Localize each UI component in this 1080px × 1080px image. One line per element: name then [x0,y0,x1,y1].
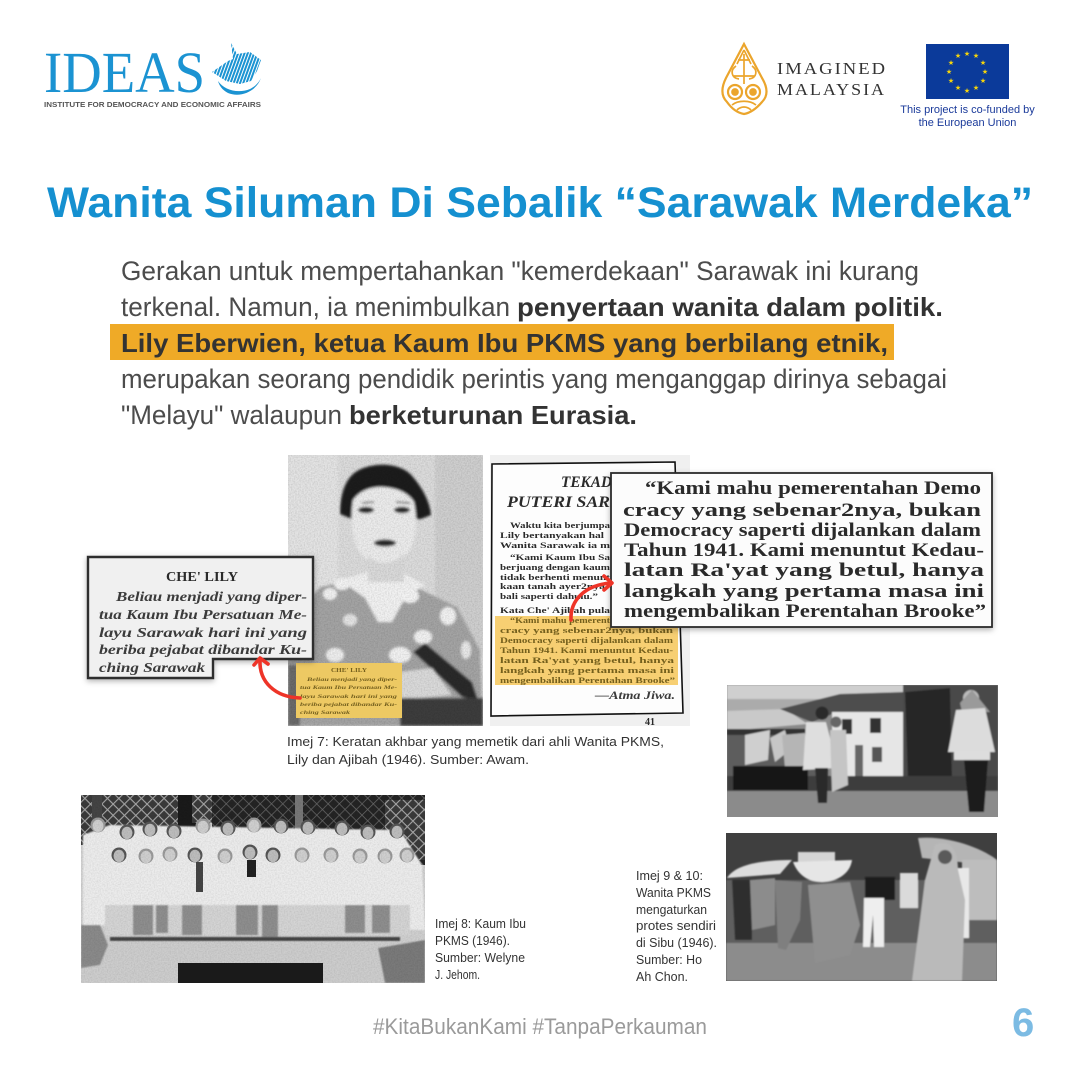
highlighted clipping: Che Lily: Beliau menjadi yang diper- [306,677,397,683]
newspaper clipping: Tekad Puteri Sarawak: langkah yang pertama masa ini [500,665,675,675]
zoomed clipping: Che Lily: CHE' LILY [166,570,238,585]
logo: EU flag [926,44,1009,99]
newspaper clipping: Tekad Puteri Sarawak: Lily bertanyakan hal [500,530,605,540]
caption: Imej 9 and 10 [636,869,717,984]
zoomed clipping: Che Lily [88,557,313,678]
logo: EU flag: ★ [973,84,979,92]
caption: Imej 8: J. Jehom. [435,968,480,982]
caption: Imej 8: PKMS (1946). [435,934,510,948]
caption: Imej 9 and 10: di Sibu (1946). [636,936,717,950]
caption: Imej 9 and 10: Imej 9 & 10: [636,869,703,883]
newspaper clipping: Tekad Puteri Sarawak: Kata Che' Ajibah pula [500,605,611,615]
caption: Imej 8 [435,917,526,982]
zoomed clipping: Kami mahu pemerentahan [611,473,992,627]
logo: Imagined Malaysia [722,44,887,114]
logo: EU flag: ★ [948,77,954,85]
logo: EU flag: ★ [973,52,979,60]
newspaper clipping: Tekad Puteri Sarawak [490,455,690,728]
intro text block: Lily Eberwien, ketua Kaum Ibu PKMS yang berbilang etnik, [121,328,888,358]
logo: EU flag: ★ [964,87,970,95]
photo: Kaum Ibu PKMS group [81,795,425,983]
caption: Imej 9 and 10: Wanita PKMS [636,886,711,900]
zoomed clipping: Kami mahu pemerentahan: “Kami mahu pemerentahan Demo [645,479,981,499]
EU co-funding note [900,104,1035,129]
highlighted clipping: Che Lily: beriba pejabat dibandar Ku- [300,702,397,708]
EU co-funding note: the European Union [919,117,1016,129]
caption: Imej 8: Sumber: Welyne [435,951,525,965]
caption: Imej 7: Imej 7: Keratan akhbar yang memetik dari ahli Wanita PKMS, [287,735,664,749]
newspaper clipping: Tekad Puteri Sarawak: berjuang dengan kaum [500,562,611,572]
newspaper clipping: Tekad Puteri Sarawak: —Atma Jiwa. [594,688,675,702]
zoomed clipping: Che Lily: layu Sarawak hari ini yang [99,625,307,640]
intro text block [110,256,947,430]
zoomed clipping: Kami mahu pemerentahan: cracy yang sebenar2nya, bukan [623,501,982,521]
logo: EU flag: ★ [955,84,961,92]
logo: IDEAS: IDEAS [44,40,205,105]
caption: Imej 7 [287,735,664,767]
newspaper clipping: Tekad Puteri Sarawak: tidak berhenti menunt [500,572,610,582]
highlighted clipping: Che Lily: CHE' LILY [331,667,367,674]
highlighted clipping: Che Lily: layu Sarawak hari ini yang [300,694,397,700]
newspaper clipping: Tekad Puteri Sarawak: Tahun 1941. Kami menuntut Kedau- [500,645,673,655]
newspaper clipping: Tekad Puteri Sarawak: Democracy saperti dijalankan dalam [500,635,674,645]
zoomed clipping: Kami mahu pemerentahan: Democracy saperti dijalankan dalam [624,521,982,541]
highlighted clipping: Che Lily [296,663,402,718]
caption: Imej 7: Lily dan Ajibah (1946). Sumber: Awam. [287,753,529,767]
caption: Imej 9 and 10: Ah Chon. [636,970,688,984]
arrow: highlighted quote to zoom [571,576,612,620]
newspaper clipping: Tekad Puteri Sarawak: mengembalikan Perentahan Brooke” [500,675,675,685]
yellow highlight [495,616,678,685]
title: Wanita Siluman Di Sebalik “Sarawak Merdeka” [47,180,1033,227]
caption: Imej 9 and 10: protes sendiri [636,919,716,933]
caption: Imej 9 and 10: mengaturkan [636,903,707,917]
logo: EU flag: ★ [946,68,952,76]
photo: protest march in front of building [727,685,998,817]
hashtags: #KitaBukanKami #TanpaPerkauman [373,1014,707,1039]
newspaper clipping: Tekad Puteri Sarawak: cracy yang sebenar2nya, bukan [500,625,673,635]
logo: Imagined Malaysia: MALAYSIA [777,80,886,99]
newspaper clipping: Tekad Puteri Sarawak: TEKAD [561,474,612,491]
newspaper clipping: Tekad Puteri Sarawak: latan Ra'yat yang betul, hanya [500,655,675,665]
photo: protest in Sibu with umbrellas [726,833,997,981]
EU co-funding note: This project is co-funded by [900,104,1035,116]
intro text block: "Melayu" walaupun [121,400,342,430]
highlight bar [110,324,894,360]
intro text block: Gerakan untuk mempertahankan "kemerdekaan" Sarawak ini kurang [121,256,919,286]
newspaper clipping: Tekad Puteri Sarawak: Waktu kita berjumpa [510,520,611,530]
zoomed clipping: Kami mahu pemerentahan: Tahun 1941. Kami menuntut Kedau- [624,541,984,561]
newspaper clipping: Tekad Puteri Sarawak: bali saperti dahulu.” [500,591,598,601]
logo: IDEAS: INSTITUTE FOR DEMOCRACY AND ECONOMIC AFFAIRS [44,100,261,109]
highlighted clipping: Che Lily: ching Sarawak [300,710,350,716]
caption: Imej 9 and 10: Sumber: Ho [636,953,702,967]
logo: EU flag: ★ [948,59,954,67]
zoomed clipping: Kami mahu pemerentahan: latan Ra'yat yang betul, hanya [624,561,984,581]
newspaper clipping: Tekad Puteri Sarawak: Wanita Sarawak ia m [500,540,611,550]
zoomed clipping: Che Lily: ching Sarawak [99,660,205,675]
zoomed clipping: Kami mahu pemerentahan: mengembalikan Perentahan Brooke” [624,602,986,622]
logo: EU flag: ★ [982,68,988,76]
newspaper clipping: Tekad Puteri Sarawak: PUTERI SAR [506,494,610,511]
intro text block: berketurunan Eurasia. [349,400,637,430]
arrow: Che Lily clipping to zoom [254,658,300,698]
logo: EU flag: ★ [980,77,986,85]
icon: IDEAS bird [212,43,261,95]
newspaper clipping: Tekad Puteri Sarawak: “Kami mahu pemerent [510,615,610,625]
newspaper clipping: Tekad Puteri Sarawak: kaan tanah ayer2nya [500,581,606,591]
logo: Imagined Malaysia: IMAGINED [777,59,887,78]
photo: Lily Eberwien portrait [287,455,483,726]
zoomed clipping: Che Lily: beriba pejabat dibandar Ku- [99,642,308,657]
intro text block: merupakan seorang pendidik perintis yang menganggap dirinya sebagai [121,364,947,394]
zoomed clipping: Che Lily: Beliau menjadi yang diper- [115,589,308,604]
logo: EU flag: ★ [955,52,961,60]
newspaper clipping: Tekad Puteri Sarawak: “Kami Kaum Ibu Sa [510,552,611,562]
intro text block: terkenal. Namun, ia menimbulkan [121,292,510,322]
page number: 6 [1012,1001,1034,1045]
zoomed clipping: Kami mahu pemerentahan: langkah yang pertama masa ini [624,582,984,602]
logo: EU flag: ★ [964,50,970,58]
caption: Imej 8: Imej 8: Kaum Ibu [435,917,526,931]
newspaper clipping: Tekad Puteri Sarawak: 41 [645,717,655,728]
photo sign [178,963,323,983]
zoomed clipping: Che Lily: tua Kaum Ibu Persatuan Me- [99,607,308,622]
intro text block: penyertaan wanita dalam politik. [517,292,943,322]
icon: gold kayon [722,44,766,114]
highlighted clipping: Che Lily: tua Kaum Ibu Persatuan Me- [300,685,397,691]
logo: EU flag: ★ [980,59,986,67]
